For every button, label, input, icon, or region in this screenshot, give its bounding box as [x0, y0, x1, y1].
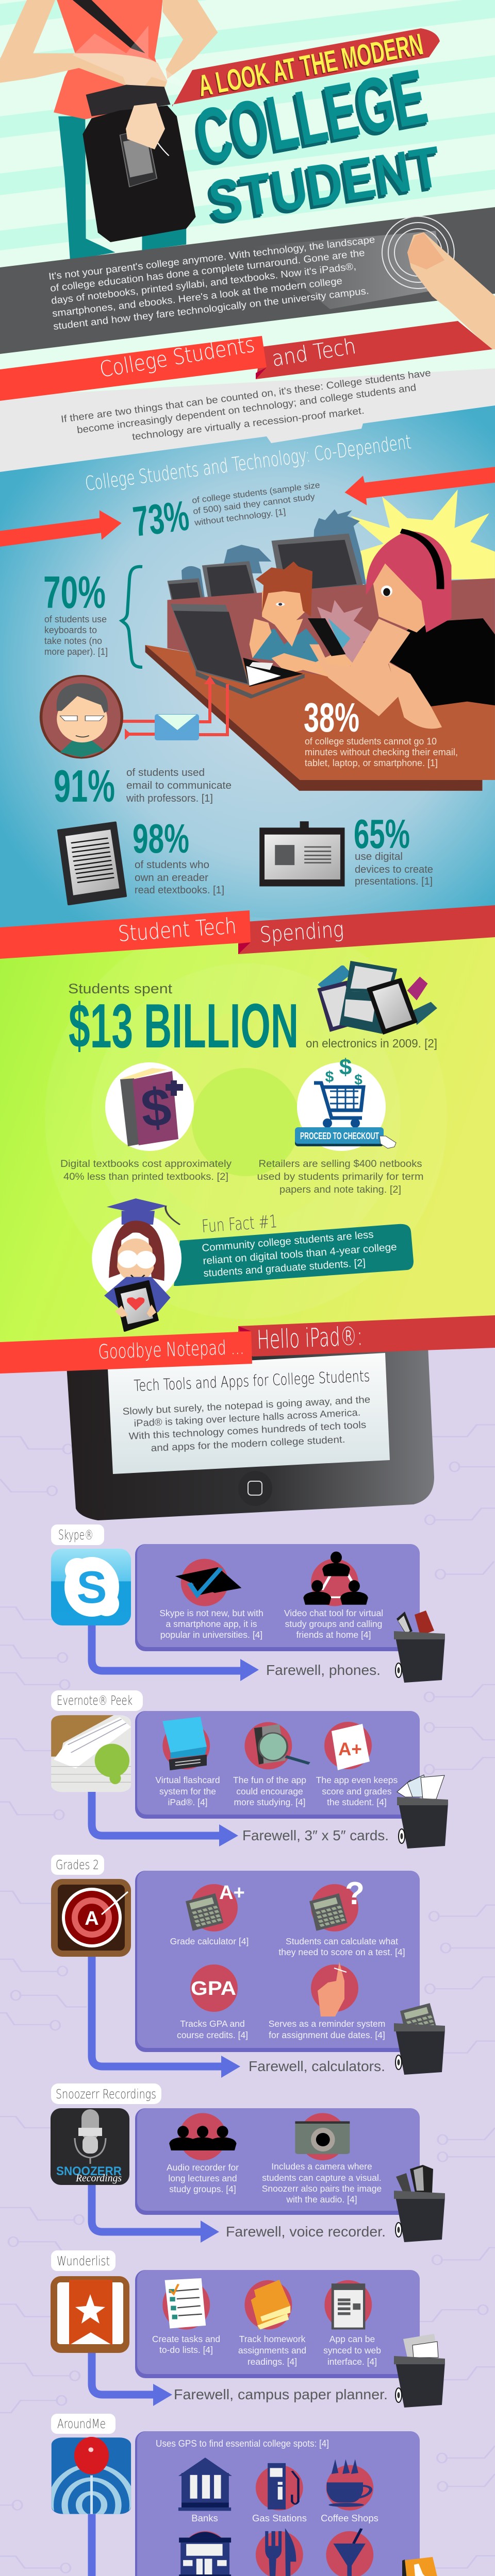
tablet in case: [86, 85, 171, 116]
stat: 70 percent: [43, 567, 108, 657]
trash: index cards: [397, 1775, 448, 1849]
section: lavender background: [0, 1346, 495, 2576]
icon: priced book: $: [139, 1077, 174, 1139]
burst behind phone: [317, 600, 377, 670]
feature text: [233, 1775, 306, 1807]
gray section text: technology are virtually a recession-proof market.: [131, 405, 365, 443]
fun fact 1 callout: [174, 1224, 414, 1286]
title line 3: STUDENT: [203, 137, 443, 236]
touch rings: [382, 216, 454, 289]
label: [51, 2250, 116, 2271]
fun fact 1 text: [202, 1229, 397, 1279]
stat: 98 percent: 98%: [133, 816, 189, 861]
aroundme intro: Uses GPS to find essential college spots: [4]: [156, 2438, 329, 2449]
main laptop: [171, 604, 305, 699]
back laptops: [167, 534, 363, 603]
app: aroundme: [51, 2414, 445, 2576]
icon: A plus paper: [324, 1722, 372, 1770]
stat: 70 percent: 70%: [43, 567, 106, 618]
farewell text: Farewell, phones.: [266, 1662, 381, 1678]
feature text: assignments and: [238, 2345, 306, 2355]
stat: 13 billion: Students spent: [68, 981, 173, 996]
arrow: [92, 1625, 259, 1681]
spending text right: used by students primarily for term: [257, 1172, 424, 1182]
app icon: [51, 2108, 129, 2185]
intro text: days of notebooks, printed syllabi, and textbooks. Now it's iPads®,: [51, 261, 357, 307]
stat: 91 percent: 91%: [54, 760, 115, 811]
illustration: student holding tablet: [0, 0, 218, 260]
gray section text: [60, 368, 432, 443]
hand on tablet: [126, 103, 165, 149]
back wall: [167, 578, 495, 707]
icon: magnified book: [244, 1722, 309, 1769]
feature text: Create tasks and: [152, 2334, 220, 2344]
phone: [328, 618, 351, 650]
stat: 98 percent: own an ereader: [135, 872, 208, 884]
phone: [120, 128, 157, 187]
label: [51, 1690, 143, 1711]
icon: gas station: [256, 2463, 303, 2511]
icon: presentation screen: [259, 821, 345, 886]
stat: 65 percent: 65%: [354, 811, 410, 857]
feature text: Video chat tool for virtual: [284, 1608, 383, 1618]
app icon: [51, 2276, 129, 2353]
girl with phone: [309, 531, 495, 728]
feature text: they need to score on a test. [4]: [278, 1947, 405, 1957]
stat: 65 percent: [354, 811, 433, 887]
fun fact 1 text: Community college students are less: [202, 1229, 374, 1254]
app icon: [51, 1879, 131, 1957]
starburst: [351, 489, 495, 579]
silhouettes: [182, 509, 366, 601]
intro text: It's not your parent's college anymore. With technology, the landscape: [48, 234, 375, 282]
app icon: SNOOZERR: [56, 2164, 122, 2178]
stat: 73 percent: [130, 481, 321, 546]
fun fact 1 text: reliant on digital tools than 4-year college: [203, 1241, 397, 1267]
ribbon: college students and tech: [0, 321, 492, 401]
trash: voice recorders: [394, 2165, 445, 2242]
feature text: Tracks GPA and: [180, 2019, 245, 2029]
intro text: student and how they fare technologically on the university campus.: [53, 285, 370, 332]
arrow: [92, 2185, 219, 2243]
fingernail: [407, 233, 444, 269]
feature text: [238, 2334, 306, 2367]
title line 3: STUDENT: [201, 138, 442, 238]
torso: [54, 0, 169, 120]
ribbon: college students and tech: and Tech: [270, 333, 358, 371]
arrows: [0, 467, 495, 547]
spending text right: Retailers are selling $400 netbooks: [259, 1159, 422, 1170]
icon: bar: [326, 2529, 373, 2576]
fun fact 1 text: students and graduate students. [2]: [203, 1257, 366, 1279]
ribbon: student tech spending: Student Tech: [117, 913, 237, 946]
stat: 73 percent: of 500) said they cannot study: [192, 492, 316, 516]
feature text: system for the: [159, 1786, 216, 1797]
earphones: [136, 120, 169, 156]
feature panel: [135, 2108, 420, 2215]
spending text left: 40% less than printed textbooks. [2]: [63, 1172, 228, 1182]
background: hero mint: [0, 0, 495, 412]
trash: phone book: [394, 2557, 445, 2576]
feature text: readings. [4]: [248, 2357, 297, 2367]
stat: 65 percent: devices to create: [355, 864, 433, 875]
feature text: could encourage: [236, 1786, 303, 1797]
feature text: Skype is not new, but with: [159, 1608, 263, 1618]
icon: shopping cart: $: [354, 1072, 362, 1088]
label: [51, 2414, 116, 2434]
farewell text: Farewell, campus paper planner.: [174, 2386, 388, 2402]
icon: grocery store: [179, 2531, 231, 2576]
desk side: [145, 645, 482, 791]
label: Snoozerr Recordings: [56, 2087, 156, 2102]
icon: reminder finger: [311, 1962, 358, 2016]
label: [51, 1524, 104, 1545]
circuit pattern: [0, 1425, 495, 2576]
phone screen: [123, 137, 153, 177]
spending text right: papers and note taking. [2]: [279, 1184, 401, 1195]
stat: 98 percent: read etextbooks. [1]: [135, 885, 224, 896]
icon: shopping cart: PROCEED TO CHECKOUT: [300, 1131, 379, 1141]
feature text: Grade calculator [4]: [170, 1936, 249, 1946]
swipe highlight: [253, 231, 444, 309]
ipad paragraph: [122, 1395, 371, 1454]
finger: [407, 232, 495, 349]
feature text: long lectures and: [168, 2173, 237, 2183]
stat: 91 percent: email to communicate: [126, 780, 232, 791]
feature text: interface. [4]: [327, 2357, 377, 2367]
section: blue background: [0, 405, 495, 943]
ipad paragraph: and apps for the modern college student.: [151, 1434, 345, 1454]
feature text: friends at home [4]: [296, 1630, 371, 1640]
stat: 65 percent: presentations. [1]: [355, 876, 433, 887]
arrow: [92, 1957, 240, 2078]
feature text: study groups. [4]: [169, 2184, 236, 2194]
ribbon: goodbye notepad hello ipad: [0, 1315, 495, 1374]
feature text: [167, 2162, 239, 2194]
stat: 70 percent: take notes (no: [44, 636, 102, 646]
stat: 98 percent: [133, 816, 224, 896]
icon: bank: [178, 2458, 232, 2511]
feature text: course credits. [4]: [177, 2030, 248, 2040]
feature text: Includes a camera where: [271, 2161, 372, 2172]
desk top: [145, 645, 495, 780]
label: Wunderlist: [57, 2253, 110, 2268]
label: AroundMe: [57, 2416, 106, 2431]
sparkle: [73, 26, 194, 103]
intro band: [0, 207, 495, 354]
arrowheads: [125, 676, 216, 740]
feature text: Audio recorder for: [167, 2162, 239, 2173]
legs: [58, 116, 186, 260]
sleeve case: [82, 106, 196, 242]
feature panel: [135, 2270, 420, 2378]
trash: paper planner: [394, 2334, 445, 2408]
icon: electronics pile: [317, 961, 437, 1034]
ipad heading: Tech Tools and Apps for College Students: [134, 1367, 370, 1395]
app icon: [52, 2437, 131, 2514]
envelope: [155, 714, 199, 740]
ribbon: goodbye notepad hello ipad: Goodbye Notepad ...: [98, 1336, 244, 1363]
feature text: Virtual flashcard: [155, 1775, 220, 1785]
icon: GPA: [190, 1964, 238, 2012]
feature panel: [135, 1544, 420, 1651]
hero stripes: [0, 0, 495, 250]
app: wunderlist: [51, 2250, 445, 2408]
icon: ereader: [58, 822, 126, 905]
stat: 38 percent: 38%: [304, 694, 359, 740]
arrow: [92, 1792, 238, 1846]
stat: 91 percent: of students used: [126, 767, 205, 778]
feature text: for assignment due dates. [4]: [269, 2030, 385, 2040]
fun fact 1 heading: Fun Fact #1: [201, 1211, 278, 1237]
app icon: A: [85, 1908, 99, 1929]
icon: calculator grade: [186, 1882, 245, 1931]
label: [51, 1855, 104, 1875]
feature panel: [135, 1871, 420, 2052]
feature panel: [135, 2431, 420, 2576]
feature text: [284, 1608, 383, 1640]
feature text: App can be: [329, 2334, 375, 2344]
stat: 98 percent: of students who: [135, 859, 209, 871]
gray section text: If there are two things that can be counted on, it's these: College students have: [60, 368, 432, 425]
feature text: [155, 1775, 220, 1807]
icon: coffee: [326, 2459, 373, 2511]
trash: calculator: [394, 2003, 445, 2075]
icon: shopping cart: $: [325, 1069, 334, 1086]
feature text: Serves as a reminder system: [269, 2019, 385, 2029]
stat: 65 percent: use digital: [355, 851, 403, 862]
icon: restaurant: [256, 2528, 303, 2576]
title line 1: [194, 27, 426, 104]
intro text: smartphones, and ebooks. Here's a look at the modern college: [52, 276, 343, 319]
title ribbon: [172, 28, 440, 107]
feature text: iPad®. [4]: [168, 1797, 208, 1807]
icon: shopping cart: [295, 1055, 396, 1151]
ipad paragraph: Slowly but surely, the notepad is going away, and the: [122, 1395, 371, 1417]
feature text: [262, 2161, 382, 2205]
spending text right: [257, 1159, 424, 1195]
icon: checklist: [162, 2278, 210, 2329]
feature panel: [135, 1711, 420, 1819]
app icon: S: [77, 1562, 107, 1613]
illustration: students at desk: [145, 489, 495, 791]
stat: 13 billion: on electronics in 2009. [2]: [306, 1037, 437, 1050]
app icon: Recordings: [75, 2173, 122, 2184]
intro text: [48, 234, 375, 332]
app: evernote peek: [51, 1690, 448, 1849]
bag strap: [73, 0, 145, 53]
feature text: [323, 2334, 381, 2367]
feature text: [177, 2019, 248, 2040]
place labels: [175, 2513, 378, 2576]
app: skype: [51, 1524, 445, 1683]
icon: calculator question: ?: [345, 1876, 365, 1911]
stat: 70 percent: more paper). [1]: [44, 647, 108, 657]
icon: books: [244, 2280, 292, 2329]
feature text: Snoozerr also pairs the image: [262, 2183, 382, 2194]
gray section text: become increasingly dependent on technology; and college students and: [76, 382, 417, 436]
icon: shopping cart: $: [339, 1055, 352, 1080]
brace: [122, 567, 142, 667]
ipad: [67, 1347, 434, 1520]
stat: 13 billion: $13 BILLION: [69, 991, 299, 1061]
trash: phones: [394, 1611, 445, 1683]
app: grades 2: [51, 1855, 445, 2078]
app icon: [51, 1715, 131, 1792]
professor portrait: [41, 676, 122, 758]
stat: 73 percent: without technology. [1]: [193, 507, 286, 528]
feature text: Track homework: [239, 2334, 306, 2344]
section: gray intro: [0, 368, 495, 472]
boy: [250, 562, 354, 677]
icon: calculator grade: A+: [219, 1882, 245, 1904]
stat: 70 percent: keyboards to: [44, 625, 97, 635]
stat: 38 percent: [304, 694, 458, 768]
place labels: Coffee Shops: [321, 2513, 378, 2523]
icon: GPA: GPA: [191, 1978, 236, 1999]
section: green spending background: [0, 917, 495, 1347]
icon: calculator question: [309, 1876, 365, 1931]
feature text: [269, 2019, 385, 2040]
stat: 73 percent: of college students (sample size: [191, 481, 321, 505]
icon: study group: [169, 2113, 237, 2160]
icon: web interface: [324, 2280, 372, 2329]
title line 2: [186, 53, 434, 184]
ribbon: student tech spending: Spending: [259, 917, 344, 947]
farewell text: Farewell, 3″ x 5″ cards.: [242, 1827, 389, 1843]
app: snoozerr recordings: [51, 2083, 445, 2243]
feature text: score and grades: [322, 1786, 392, 1797]
feature text: [159, 1608, 263, 1640]
arms: [0, 0, 218, 104]
arrow: [92, 2514, 180, 2576]
feature text: the student. [4]: [327, 1797, 387, 1807]
label: [51, 2083, 161, 2104]
icon: A plus paper: A+: [338, 1739, 362, 1759]
feature text: [278, 1936, 405, 1957]
ribbon: student tech spending: [0, 905, 495, 959]
spending text left: Digital textbooks cost approximately: [60, 1159, 232, 1170]
graduate with tablet: [92, 1198, 182, 1331]
feature text: a smartphone app, it is: [166, 1619, 257, 1629]
feature text: with the audio. [4]: [286, 2194, 357, 2205]
stat: 38 percent: minutes without checking their email,: [305, 747, 458, 757]
ipad paragraph: iPad® is taking over lecture halls across America.: [134, 1408, 361, 1429]
feature text: The app even keeps: [316, 1775, 398, 1785]
email arrows: [123, 683, 227, 735]
feature text: popular in universities. [4]: [160, 1630, 262, 1640]
feature text: students can capture a visual.: [262, 2173, 382, 2183]
label: Evernote® Peek: [57, 1693, 133, 1708]
stat: 73 percent: 73%: [130, 492, 191, 546]
feature text: synced to web: [323, 2345, 381, 2355]
place labels: Gas Stations: [252, 2513, 307, 2523]
stat: 38 percent: tablet, laptop, or smartphone. [1]: [305, 758, 438, 768]
arrow: [92, 2353, 172, 2406]
farewell text: Farewell, calculators.: [249, 2058, 385, 2074]
icon: priced book: [105, 1062, 194, 1151]
stat: 38 percent: of college students cannot go 10: [305, 736, 437, 747]
ipad paragraph: With this technology comes hundreds of tech tools: [128, 1419, 367, 1442]
feature text: Students can calculate what: [286, 1936, 398, 1946]
feature text: more studying. [4]: [234, 1797, 306, 1807]
spending text left: [60, 1159, 232, 1182]
app icon: [51, 1549, 131, 1625]
icon: camera: [295, 2113, 350, 2160]
feature text: [152, 2334, 220, 2355]
label: Grades 2: [56, 1857, 99, 1872]
feature text: to-do lists. [4]: [159, 2345, 213, 2355]
place labels: Banks: [191, 2513, 218, 2523]
intro text: of college education has done a complete turnaround. Gone are the: [50, 248, 366, 294]
icon: graduation check: [175, 1559, 241, 1606]
ribbon: goodbye notepad hello ipad: Hello iPad®:: [256, 1321, 363, 1355]
icon: study group: [303, 1551, 368, 1606]
stat: 91 percent: with professors. [1]: [126, 793, 213, 804]
label: Skype®: [58, 1528, 93, 1543]
icon: flashcards: [162, 1717, 210, 1770]
title line 3: STUDENT: [204, 134, 445, 234]
feature text: study groups and calling: [285, 1619, 382, 1629]
feature text: [316, 1775, 398, 1807]
stat: 91 percent: [54, 760, 232, 811]
farewell text: Farewell, voice recorder.: [226, 2224, 386, 2240]
stat: 70 percent: of students use: [44, 614, 107, 624]
feature text: The fun of the app: [233, 1775, 306, 1785]
ribbon: college students and tech: College Students: [98, 331, 256, 382]
